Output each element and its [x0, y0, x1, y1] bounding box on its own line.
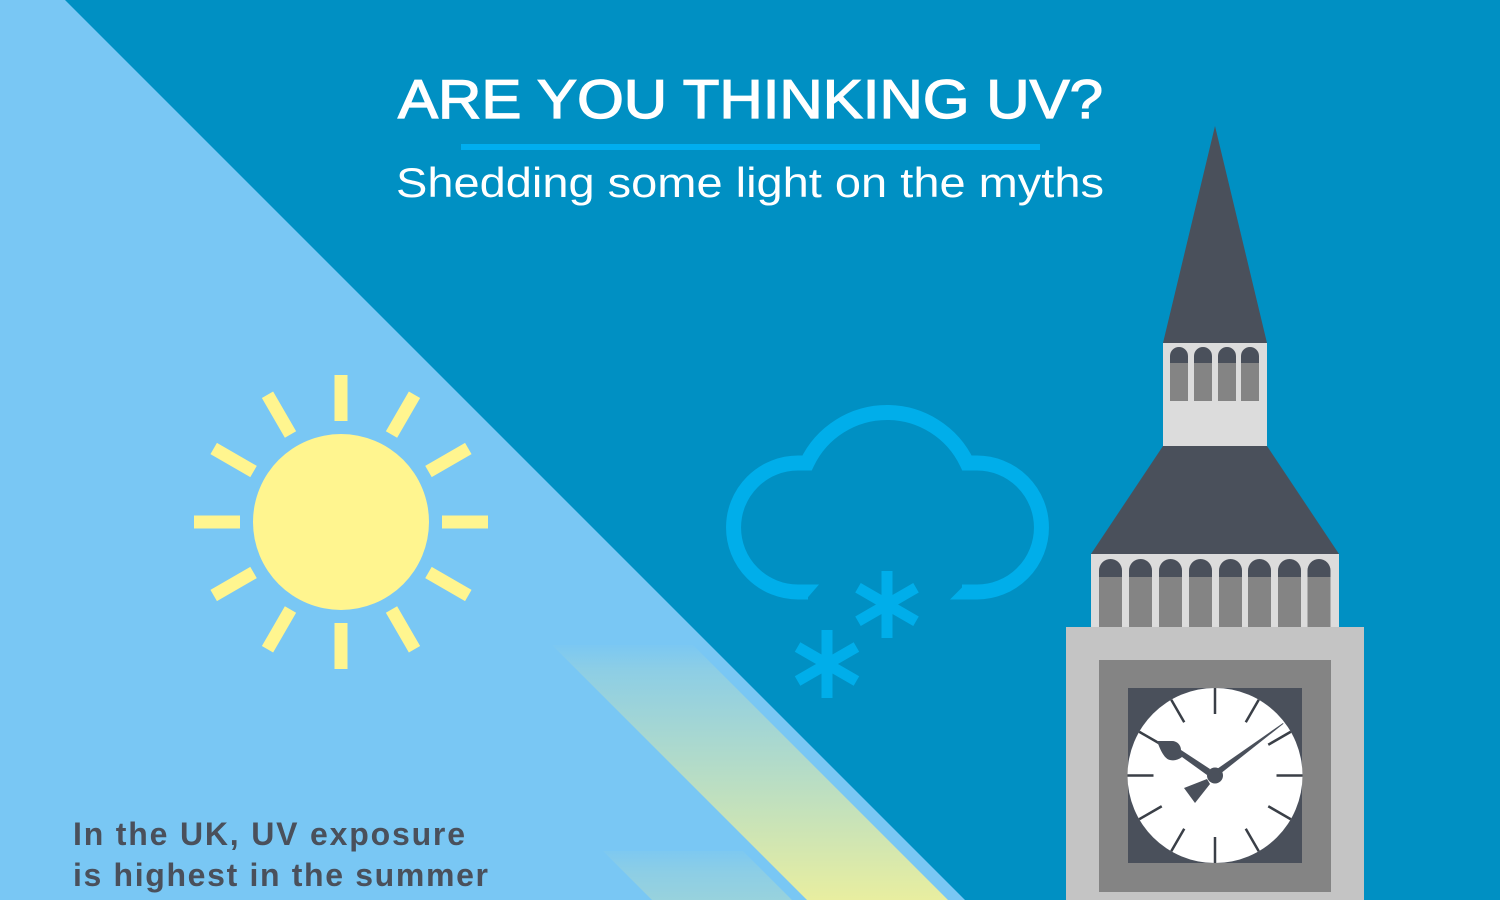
subtitle: Shedding some light on the myths	[396, 159, 1104, 206]
clock hands	[1157, 723, 1284, 803]
cloud outline	[734, 412, 1041, 600]
title: ARE YOU THINKING UV?	[398, 68, 1103, 130]
gallery	[1091, 554, 1339, 627]
snowflake: lower	[798, 630, 856, 698]
panel: light blue diagonal	[0, 0, 965, 900]
light beam: main	[552, 645, 948, 900]
icon: sun	[194, 375, 488, 669]
text block: UK UV exposure	[73, 816, 488, 893]
text block: UK UV exposure: In the UK, UV exposure	[73, 816, 465, 852]
icon: Big Ben clock tower	[1066, 126, 1364, 900]
lower roof	[1091, 446, 1339, 554]
clock face	[1128, 688, 1302, 863]
title underline	[461, 144, 1040, 150]
text block: UK UV exposure: is highest in the summer	[73, 857, 488, 893]
snowflake: upper	[858, 571, 916, 638]
belfry	[1163, 343, 1267, 446]
spire	[1163, 126, 1267, 343]
icon: cloud with snow	[734, 412, 1041, 698]
clock housing	[1066, 627, 1364, 900]
light beam: secondary	[603, 851, 792, 900]
